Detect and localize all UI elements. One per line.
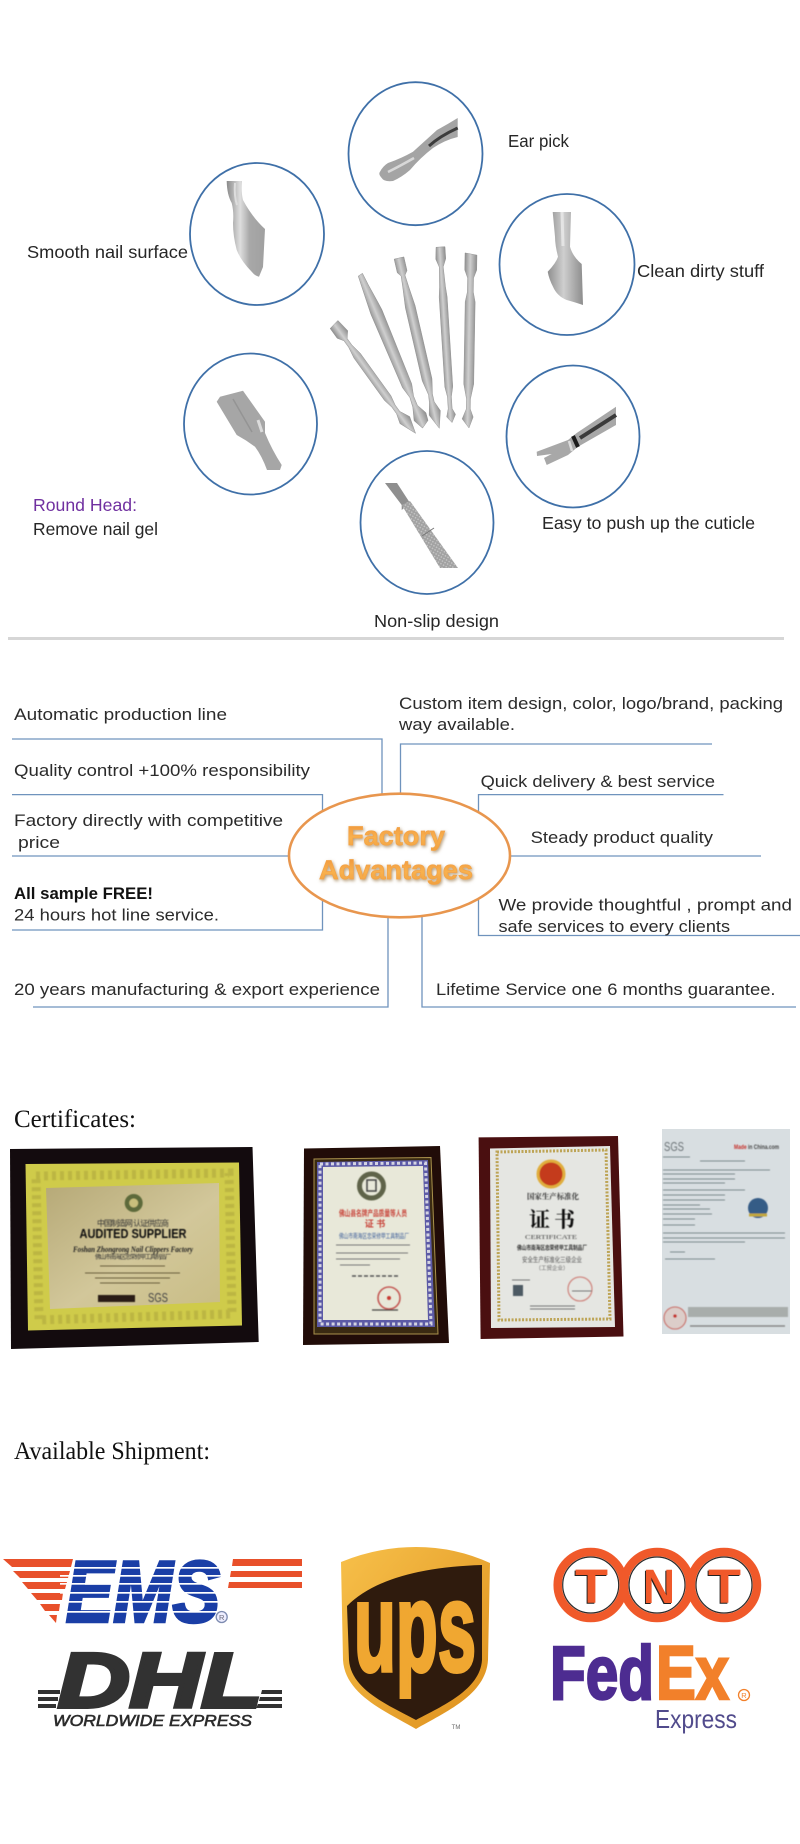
label: non-slip design: Non-slip design xyxy=(374,611,499,631)
logo: DHL: WORLDWIDE EXPRESS xyxy=(53,1713,253,1730)
logo: TNT: N xyxy=(643,1561,675,1614)
certificate: audited supplier plaque: Foshan Zhongrong Nail Clippers Factory xyxy=(72,1245,193,1254)
logo: EMS xyxy=(3,1544,302,1640)
certificate: audited supplier plaque: 中国制造网 认证供应商 xyxy=(97,1218,169,1228)
connector lines xyxy=(12,739,800,1007)
logo: FedEx Express: Fed xyxy=(550,1631,654,1716)
logo: TNT: T xyxy=(708,1561,741,1614)
certificate: safety standardization framed: 证书 xyxy=(529,1208,576,1232)
certificate: quality product framed: 佛山市南海区忠荣修甲工具制品厂 xyxy=(339,1231,409,1240)
heading: available shipment: Available Shipment: xyxy=(14,1438,210,1465)
heading: certificates: Certificates: xyxy=(14,1106,136,1133)
certificate: safety standardization framed: （工贸企业） xyxy=(535,1264,569,1272)
label: clean dirty stuff: Clean dirty stuff xyxy=(637,261,764,281)
right advantage texts: Lifetime Service one 6 months guarantee. xyxy=(436,980,776,999)
right advantage texts: safe services to every clients xyxy=(498,917,730,936)
certificate: safety standardization framed xyxy=(479,1136,624,1339)
logo: FedEx Express: Express xyxy=(655,1704,737,1734)
circle: round head xyxy=(184,354,317,494)
logo: UPS shield: TM xyxy=(452,1725,460,1731)
left advantage texts: 20 years manufacturing & export experience xyxy=(14,980,380,999)
logo: DHL xyxy=(38,1638,282,1730)
right advantage texts: way available. xyxy=(398,715,515,734)
left advantage texts: price xyxy=(18,833,60,852)
circle: ear pick xyxy=(348,82,482,225)
right advantage texts: Steady product quality xyxy=(531,828,714,847)
logo: EMS: R xyxy=(219,1613,225,1622)
label: round head remove nail gel xyxy=(33,495,158,539)
center ellipse: factory advantages: Advantages xyxy=(319,855,473,885)
center ellipse: factory advantages: Factory xyxy=(347,821,445,851)
logo: FedEx Express xyxy=(550,1631,750,1734)
logo: TNT: T xyxy=(574,1562,607,1615)
left advantage texts: Quality control +100% responsibility xyxy=(14,761,311,780)
label: smooth nail surface: Smooth nail surface xyxy=(27,242,188,262)
left advantage texts: 24 hours hot line service. xyxy=(14,906,219,924)
circle: non-slip design xyxy=(360,451,494,594)
logo: TNT: N xyxy=(642,1562,674,1615)
certificate: safety standardization framed: 安全生产标准化三级企业 xyxy=(522,1255,582,1264)
certificate: quality product framed xyxy=(303,1146,449,1345)
right advantage texts: Custom item design, color, logo/brand, packing xyxy=(399,694,783,713)
label: easy to push up the cuticle: Easy to push up the cuticle xyxy=(542,513,755,533)
logo: FedEx Express: Ex xyxy=(656,1631,729,1716)
logo: UPS shield: ups xyxy=(354,1557,476,1698)
certificate: SGS Made-in-China report: Made in China.com xyxy=(734,1144,779,1151)
center ellipse: factory advantages xyxy=(289,794,510,917)
left advantage texts: Factory directly with competitive xyxy=(14,811,283,830)
right advantage texts: Quick delivery & best service xyxy=(481,772,715,791)
divider xyxy=(8,637,784,640)
certificate: safety standardization framed: 国家生产标准化 xyxy=(527,1191,579,1201)
certificate: audited supplier plaque: SGS xyxy=(148,1290,168,1305)
right advantage texts xyxy=(398,694,792,999)
circle: clean dirty stuff xyxy=(500,194,634,335)
certificate: audited supplier plaque: AUDITED SUPPLIER xyxy=(80,1226,187,1241)
left advantage texts xyxy=(14,705,380,999)
label: round head remove nail gel: Round Head: xyxy=(33,495,137,515)
circle: push up the cuticle xyxy=(506,366,640,508)
right advantage texts: We provide thoughtful , prompt and xyxy=(498,896,792,914)
certificate: SGS Made-in-China report: SGS xyxy=(664,1139,684,1154)
left advantage texts: All sample FREE! xyxy=(14,884,153,903)
logo: TNT xyxy=(558,1552,757,1618)
certificate: quality product framed: 佛山县名牌产品质量等人员 xyxy=(339,1208,407,1218)
circle: smooth nail surface xyxy=(190,163,324,305)
left advantage texts: Automatic production line xyxy=(14,705,227,724)
certificate: safety standardization framed: CERTIFICATE xyxy=(525,1235,577,1241)
certificate: safety standardization framed: 佛山市南海区忠荣修甲工具制品厂 xyxy=(517,1244,587,1252)
certificate: audited supplier plaque: 佛山市南海区忠荣修甲工具制品厂 xyxy=(95,1253,171,1261)
logo: EMS: EMS xyxy=(66,1544,220,1640)
certificate: audited supplier plaque xyxy=(10,1147,259,1349)
logo: DHL: DHL xyxy=(58,1638,262,1724)
logo: TNT: T xyxy=(707,1562,740,1615)
panel: factory advantages diagram xyxy=(12,694,800,1007)
logo: UPS shield xyxy=(341,1547,490,1731)
label: round head remove nail gel: Remove nail gel xyxy=(33,519,158,539)
certificate: quality product framed: 证 书 xyxy=(365,1218,385,1229)
certificate: SGS Made-in-China report xyxy=(662,1129,790,1334)
logo: FedEx Express: R xyxy=(741,1691,747,1700)
panel: nail tool features xyxy=(27,82,764,631)
photo: five nail tools xyxy=(329,247,477,438)
logo: TNT: T xyxy=(575,1561,608,1614)
label: ear pick: Ear pick xyxy=(508,131,569,151)
